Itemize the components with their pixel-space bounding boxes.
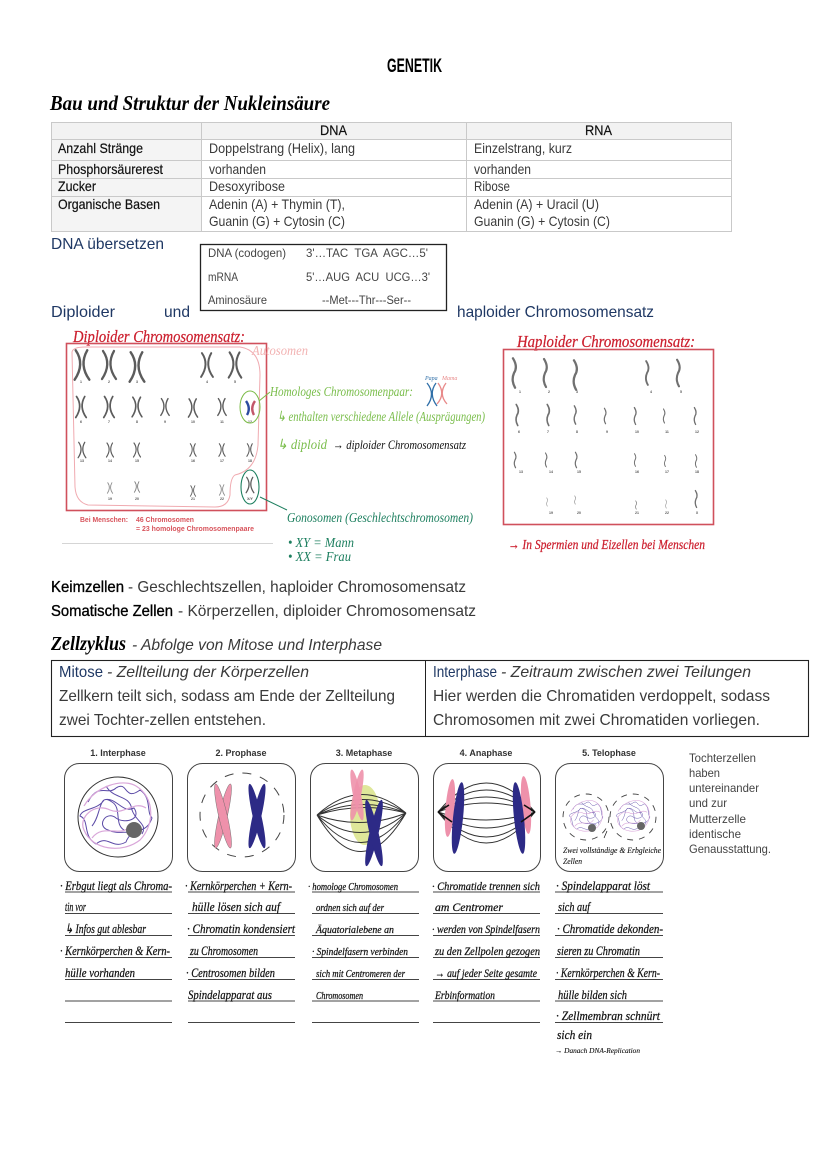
chromosome numbers: 4 xyxy=(650,390,652,394)
chromosome numbers: 21 xyxy=(635,511,639,515)
notes: Interphase xyxy=(60,878,172,1022)
phase 3: Metaphase: 3. Metaphase xyxy=(336,748,392,758)
caption: Bei Menschen: = 23 homologe Chromosomenpaare xyxy=(136,524,254,533)
heading: Diploider und haploider Chromosomensatz: haploider Chromosomensatz xyxy=(457,304,654,321)
chromosome numbers: 19 xyxy=(108,497,112,501)
title: GENETIK xyxy=(387,56,442,77)
definition: Somatische Zellen: Somatische Zellen xyxy=(51,603,173,620)
phase 2: Prophase xyxy=(188,748,296,872)
single chromosomes xyxy=(513,358,697,509)
chromosome numbers: 1 xyxy=(80,380,82,384)
chromosome numbers: 9 xyxy=(606,430,608,434)
Interphase text: Interphase xyxy=(433,664,497,681)
phase 4: Anaphase: 4. Anaphase xyxy=(460,748,512,758)
icon: papa and mama chromosomes: Papa xyxy=(424,376,438,382)
definition: Somatische Zellen: - Körperzellen, diploider Chromosomensatz xyxy=(178,603,476,620)
phase 2: Prophase: 2. Prophase xyxy=(215,748,267,758)
table: DNA vs RNA: Organische Basen xyxy=(58,196,160,212)
chromosome numbers: 17 xyxy=(220,459,224,463)
table: DNA vs RNA: vorhanden xyxy=(209,161,266,177)
chromosome numbers: 13 xyxy=(80,459,84,463)
note: Tochterzellen: Mutterzelle xyxy=(689,812,746,826)
notes: Prophase: zu Chromosomen xyxy=(189,943,258,958)
chromosome numbers: 17 xyxy=(665,470,669,474)
heading: Diploider und haploider Chromosomensatz xyxy=(51,304,654,321)
Interphase text: Hier werden die Chromatiden verdoppelt, sodass xyxy=(433,688,770,705)
notes: Prophase: hülle lösen sich auf xyxy=(192,899,282,914)
chromosome numbers: 8 xyxy=(136,420,138,424)
annotation: homologes Chromosomenpaar: → diploider Chromosomensatz xyxy=(333,437,466,452)
chromosome numbers xyxy=(518,390,699,515)
Interphase text xyxy=(433,664,770,729)
definition: Somatische Zellen xyxy=(51,603,476,620)
note: Tochterzellen xyxy=(689,751,771,856)
phase 3: Metaphase xyxy=(310,748,418,872)
notes: Metaphase: Äquatorialebene an xyxy=(315,924,394,936)
table: DNA vs RNA: Adenin (A) + Uracil (U) xyxy=(474,196,599,212)
notes: Telophase: · Kernkörperchen & Kern- xyxy=(556,965,660,980)
note: Tochterzellen: Tochterzellen xyxy=(689,751,756,765)
box: codon translation: Aminosäure xyxy=(208,293,267,307)
Interphase text: Chromosomen mit zwei Chromatiden vorliegen. xyxy=(433,712,760,729)
chromosome numbers: 19 xyxy=(549,511,553,515)
notes: Metaphase: Chromosomen xyxy=(316,990,363,1002)
chromosome numbers: 6 xyxy=(518,430,520,434)
notes: Interphase: · Kernkörperchen & Kern- xyxy=(60,943,170,958)
phase 5: Telophase: 5. Telophase xyxy=(582,748,636,758)
notes: Telophase: · Zellmembran schnürt xyxy=(556,1008,660,1023)
note: Tochterzellen: identische xyxy=(689,827,741,841)
chromosome numbers: 14 xyxy=(108,459,112,463)
phase 5: Telophase: Zwei vollständige & Erbgleiche xyxy=(563,846,661,855)
chromosome pairs xyxy=(75,350,255,496)
panel: Mitose and Interphase xyxy=(52,660,808,736)
notes: Anaphase: · werden von Spindelfasern xyxy=(432,922,540,936)
notes: Interphase: ↳ Infos gut ablesbar xyxy=(65,921,147,936)
chromosome numbers: 2 xyxy=(548,390,550,394)
chromosome numbers: 1 xyxy=(519,390,521,394)
notes: Anaphase: zu den Zellpolen gezogen xyxy=(434,944,540,958)
chromosome numbers: 22 xyxy=(665,511,669,515)
chromosome numbers: 7 xyxy=(547,430,549,434)
chromosome numbers: X/Y xyxy=(247,497,253,501)
table: DNA vs RNA xyxy=(51,122,732,232)
annotation: homologes Chromosomenpaar xyxy=(240,376,485,453)
annotation: Gonosomen: Gonosomen (Geschlechtschromosomen) xyxy=(287,511,473,526)
phase 1: Interphase xyxy=(64,748,172,872)
chromosome numbers: 5 xyxy=(234,380,236,384)
box: codon translation: 3'…TAC TGA AGC…5' xyxy=(306,246,428,260)
caption: Bei Menschen: 46 Chromosomen xyxy=(136,515,194,524)
table: DNA vs RNA: vorhanden xyxy=(474,161,531,177)
notes: Prophase: · Chromatin kondensiert xyxy=(187,921,295,936)
heading: Diploider und haploider Chromosomensatz: und xyxy=(164,304,190,321)
phase 5: Telophase: Zellen xyxy=(563,857,582,866)
chromosome numbers: 11 xyxy=(220,420,224,424)
box: codon translation: DNA (codogen) xyxy=(208,246,286,260)
phase 5: Telophase xyxy=(556,748,664,872)
chromosome numbers: 16 xyxy=(635,470,639,474)
Mitose text: Mitose xyxy=(59,664,103,681)
chromosome numbers: 11 xyxy=(665,430,669,434)
autosomes label: Autosomen xyxy=(251,344,308,359)
chromosome numbers: 12 xyxy=(248,420,252,424)
karyotype frame xyxy=(66,344,266,510)
Mitose text: Zellkern teilt sich, sodass am Ende der Zellteilung xyxy=(59,688,395,705)
chromosome numbers: 3 xyxy=(136,380,138,384)
notes: Telophase: sich auf xyxy=(558,899,592,914)
annotation: Gonosomen: • XY = Mann xyxy=(288,536,354,551)
notes: Prophase: · Centrosomen bilden xyxy=(186,965,275,980)
karyotype frame xyxy=(504,350,714,524)
chromosome numbers: 18 xyxy=(695,470,699,474)
panel: haploid karyotype xyxy=(504,332,714,553)
phase 4: Anaphase xyxy=(434,748,540,872)
notes: Anaphase: am Centromer xyxy=(435,900,503,914)
table: DNA vs RNA: Guanin (G) + Cytosin (C) xyxy=(209,213,345,229)
box: codon translation: --Met---Thr---Ser-- xyxy=(322,293,411,307)
chromosome numbers: 14 xyxy=(549,470,553,474)
notes: Anaphase: Erbinformation xyxy=(434,988,495,1002)
heading: Zellzyklus: - Abfolge von Mitose und Interphase xyxy=(132,637,382,654)
chromosome numbers: X xyxy=(696,511,699,515)
definition: Keimzellen: Keimzellen xyxy=(51,579,124,596)
chromosome numbers: 10 xyxy=(191,420,195,424)
chromosome numbers: 13 xyxy=(519,470,523,474)
autosome outline xyxy=(72,347,260,507)
chromosome numbers: 16 xyxy=(191,459,195,463)
chromosome numbers: 6 xyxy=(80,420,82,424)
annotation: homologes Chromosomenpaar: Homologes Chromosomenpaar: xyxy=(269,385,413,400)
heading: Bau und Struktur: Bau und Struktur der Nukleinsäure xyxy=(49,91,330,115)
chromosome numbers: 4 xyxy=(206,380,208,384)
notes: Metaphase: · Spindelfasern verbinden xyxy=(312,946,408,958)
note: Tochterzellen: haben xyxy=(689,766,720,780)
heading: Diploider und haploider Chromosomensatz: Diploider xyxy=(51,304,116,321)
chromosome numbers: 18 xyxy=(248,459,252,463)
table: DNA vs RNA: Zucker xyxy=(58,178,96,194)
notes: Interphase: tin vor xyxy=(65,899,87,914)
caption: Bei Menschen: Bei Menschen: xyxy=(80,515,128,524)
chromosome numbers: 21 xyxy=(191,497,195,501)
box: codon translation: mRNA xyxy=(208,270,238,284)
note: Spermien und Eizellen: → In Spermien und Eizellen bei Menschen xyxy=(508,538,705,553)
notes: Prophase xyxy=(185,878,295,1022)
table: DNA vs RNA: Adenin (A) + Thymin (T), xyxy=(209,196,345,212)
chromosome numbers xyxy=(80,380,253,501)
table: DNA vs RNA: Einzelstrang, kurz xyxy=(474,140,572,156)
chromosome numbers: 8 xyxy=(576,430,578,434)
notes: Metaphase: · homologe Chromosomen xyxy=(308,881,398,893)
phase 1: Interphase: 1. Interphase xyxy=(90,748,146,758)
heading: Zellzyklus: Zellzyklus xyxy=(50,633,126,655)
handwritten title: haploid: Haploider Chromosomensatz: xyxy=(516,332,695,351)
Mitose text xyxy=(59,664,395,729)
notes: Telophase: · Chromatide dekonden- xyxy=(557,921,663,936)
chromosome numbers: 22 xyxy=(220,497,224,501)
table: DNA vs RNA: Anzahl Stränge xyxy=(58,140,143,156)
notes: Interphase: hülle vorhanden xyxy=(65,965,135,980)
caption: Bei Menschen xyxy=(80,515,254,533)
chromosome numbers: 7 xyxy=(108,420,110,424)
table: DNA vs RNA: Phosphorsäurerest xyxy=(58,161,163,177)
panel: diploid karyotype xyxy=(62,327,308,544)
chromosome numbers: 2 xyxy=(108,380,110,384)
icon: papa and mama chromosomes xyxy=(424,376,457,406)
chromosome numbers: 5 xyxy=(680,390,682,394)
notes: Metaphase: sich mit Centromeren der xyxy=(316,968,406,980)
chromosome numbers: 10 xyxy=(635,430,639,434)
notes: Interphase: · Erbgut liegt als Chroma- xyxy=(60,878,172,893)
chromosome numbers: 9 xyxy=(164,420,166,424)
notes: Telophase: sich ein xyxy=(557,1027,592,1042)
definition: Keimzellen: - Geschlechtszellen, haploider Chromosomensatz xyxy=(128,579,466,596)
notes: Metaphase xyxy=(308,881,419,1022)
annotation: homologes Chromosomenpaar: ↳ enthalten verschiedene Allele (Ausprägungen) xyxy=(277,410,485,425)
notes: Telophase: sieren zu Chromatin xyxy=(557,943,640,958)
table: DNA vs RNA: Doppelstrang (Helix), lang xyxy=(209,140,355,156)
table: DNA vs RNA: Ribose xyxy=(474,178,510,194)
chromosome numbers: 12 xyxy=(695,430,699,434)
icon: papa and mama chromosomes: Mama xyxy=(441,376,457,382)
annotation: Gonosomen xyxy=(241,470,473,565)
box: codon translation xyxy=(200,244,446,310)
chromosome numbers: 15 xyxy=(577,470,581,474)
chromosome numbers: 15 xyxy=(135,459,139,463)
notes: Prophase: · Kernkörperchen + Kern- xyxy=(185,878,292,893)
table: DNA vs RNA: Guanin (G) + Cytosin (C) xyxy=(474,213,610,229)
notes: Anaphase xyxy=(432,879,540,1022)
table: DNA vs RNA: DNA xyxy=(320,122,348,138)
table: DNA vs RNA: Desoxyribose xyxy=(209,178,285,194)
table: DNA vs RNA: RNA xyxy=(585,122,613,138)
note: Tochterzellen: untereinander xyxy=(689,781,759,795)
annotation: Gonosomen: • XX = Frau xyxy=(288,550,351,565)
handwritten title: diploid: Diploider Chromosomensatz: xyxy=(72,327,245,346)
Interphase text: - Zeitraum zwischen zwei Teilungen xyxy=(501,664,751,681)
heading: DNA übersetzen: DNA übersetzen xyxy=(51,236,164,253)
Mitose text: zwei Tochter-zellen entstehen. xyxy=(59,712,266,729)
notes: Metaphase: ordnen sich auf der xyxy=(316,902,385,914)
chromosome numbers: 3 xyxy=(576,390,578,394)
box: codon translation: 5'…AUG ACU UCG…3' xyxy=(306,270,430,284)
annotation: homologes Chromosomenpaar: ↳ diploid xyxy=(277,438,328,453)
notes: Anaphase: → auf jeder Seite gesamte xyxy=(435,966,538,980)
notes: Telophase xyxy=(555,878,663,1055)
note: Tochterzellen: Genausstattung. xyxy=(689,842,771,856)
notes: Telophase: → Danach DNA-Replication xyxy=(555,1047,641,1055)
chromosome numbers: 20 xyxy=(577,511,581,515)
heading: Zellzyklus xyxy=(50,633,382,655)
notes: Anaphase: · Chromatide trennen sich xyxy=(432,879,540,893)
notes: Telophase: hülle bilden sich xyxy=(558,987,627,1002)
notes: Prophase: Spindelapparat aus xyxy=(188,987,272,1002)
chromosome numbers: 20 xyxy=(135,497,139,501)
note: Tochterzellen: und zur xyxy=(689,796,727,810)
Mitose text: - Zellteilung der Körperzellen xyxy=(107,664,309,681)
notes: Telophase: · Spindelapparat löst xyxy=(556,878,650,893)
